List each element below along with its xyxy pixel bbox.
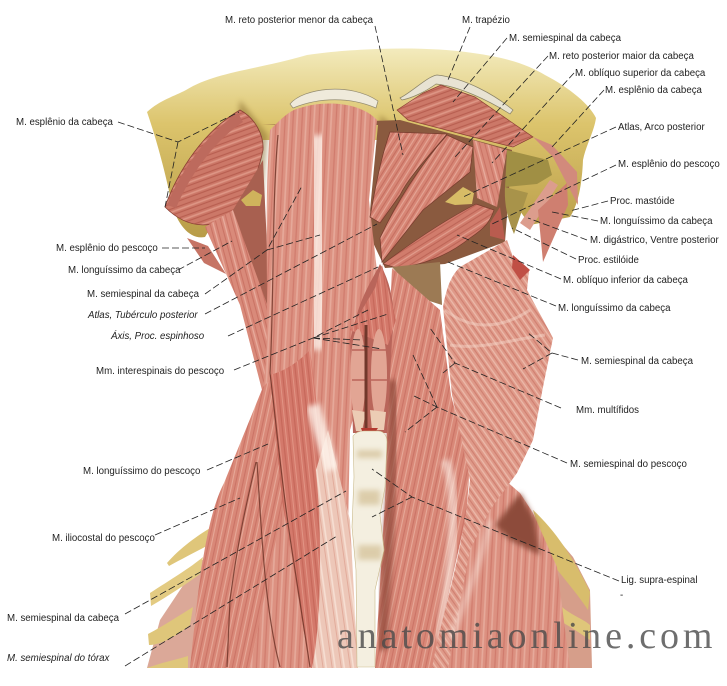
labels: M. semiespinal da cabeça [581, 356, 694, 367]
labels: M. digástrico, Ventre posterior [590, 235, 719, 246]
labels: M. esplênio do pescoço [618, 159, 720, 170]
mastoid bone dark [505, 150, 552, 187]
labels: M. esplênio da cabeça [16, 117, 114, 128]
dark shadow on cervicis [382, 380, 393, 650]
rib 2 right [558, 605, 590, 640]
dark small muscle [490, 207, 505, 240]
dark shadow lower right [495, 493, 540, 555]
labels: M. longuíssimo da cabeça [558, 303, 671, 314]
atlas yellow patch [445, 187, 474, 205]
labels: M. oblíquo inferior da cabeça [563, 275, 689, 286]
brown gap muscle [233, 160, 270, 310]
cut edge highlight [167, 113, 243, 208]
labels: Atlas, Tubérculo posterior [87, 310, 198, 321]
small left muscle [187, 238, 226, 274]
rib 1 left [167, 527, 212, 566]
labels: Mm. interespinais do pescoço [96, 366, 224, 377]
skull bone [147, 49, 596, 237]
right slim muscle [533, 137, 578, 205]
small right muscle [520, 180, 558, 230]
labels: Proc. estilóide [578, 255, 639, 266]
labels: M. semiespinal do pescoço [570, 459, 687, 470]
labels: Áxis, Proc. espinhoso [110, 331, 205, 342]
labels: - [620, 590, 623, 601]
pale streak on cervicis [440, 460, 453, 640]
mastoid lower bone [505, 187, 528, 234]
leader lines [118, 26, 619, 666]
bone ridge: left [290, 89, 378, 108]
left strip [205, 210, 272, 400]
rectus capitis posterior major [380, 135, 473, 262]
lower right neck muscles [445, 480, 570, 668]
labels: M. semiespinal da cabeça [7, 613, 120, 624]
labels: Mm. multífidos [576, 405, 639, 416]
labels: M. longuíssimo da cabeça [600, 216, 713, 227]
pale central lower band [312, 430, 358, 668]
obliquus inferior [383, 204, 494, 268]
highlights on main column [316, 135, 320, 350]
right ribs [533, 510, 592, 668]
ligament tan patches [357, 450, 382, 560]
right semispinalis capitis [432, 240, 553, 668]
main left semispinalis capitis [201, 104, 378, 668]
labels: M. oblíquo superior da cabeça [575, 68, 706, 79]
labels: M. reto posterior menor da cabeça [225, 15, 374, 26]
multifidus and semispinalis cervicis [375, 268, 470, 668]
rib 1 right [533, 510, 590, 610]
labels: Lig. supra-espinal [621, 575, 697, 586]
rib 3 left [148, 607, 193, 645]
supraspinous ligament [352, 431, 387, 667]
top cut trapezius [397, 85, 533, 147]
labels: M. longuíssimo do pescoço [83, 466, 200, 477]
labels: M. semiespinal da cabeça [87, 289, 200, 300]
dark triangle [392, 262, 442, 305]
central lower band [270, 350, 345, 668]
digastric [538, 183, 568, 262]
pale lower tail [450, 520, 490, 640]
labels: M. semiespinal do tórax [7, 653, 110, 664]
left ribs [147, 560, 230, 668]
obliquus superior [473, 140, 507, 207]
herringbone upper fibres [445, 310, 545, 346]
labels: M. reto posterior maior da cabeça [549, 51, 694, 62]
rib 4 left [147, 656, 188, 668]
lower highlight [313, 405, 332, 470]
labels: Proc. mastóide [610, 196, 675, 207]
labels: Atlas, Arco posterior [618, 122, 705, 133]
watermark: anatomiaonline.com [337, 615, 716, 657]
rectus capitis posterior minor [370, 132, 447, 223]
labels: M. iliocostal do pescoço [52, 533, 155, 544]
interspinales column [350, 264, 396, 433]
bone ridge: right [400, 75, 513, 114]
outer left lower muscle [190, 380, 284, 668]
dark seams on left [227, 135, 310, 667]
small red bump [512, 255, 530, 280]
labels: M. semiespinal da cabeça [509, 33, 622, 44]
dark backing behind central muscles [262, 120, 512, 268]
illustration: neck muscles [147, 49, 596, 668]
labels: M. trapézio [462, 15, 510, 26]
labels: M. esplênio do pescoço [56, 243, 158, 254]
yellow patch [241, 190, 262, 206]
labels: M. esplênio da cabeça [605, 85, 703, 96]
bone shadow [225, 100, 405, 225]
left cut splenius [165, 110, 263, 225]
rib 2 left [150, 557, 203, 606]
labels: M. longuíssimo da cabeça [68, 265, 181, 276]
